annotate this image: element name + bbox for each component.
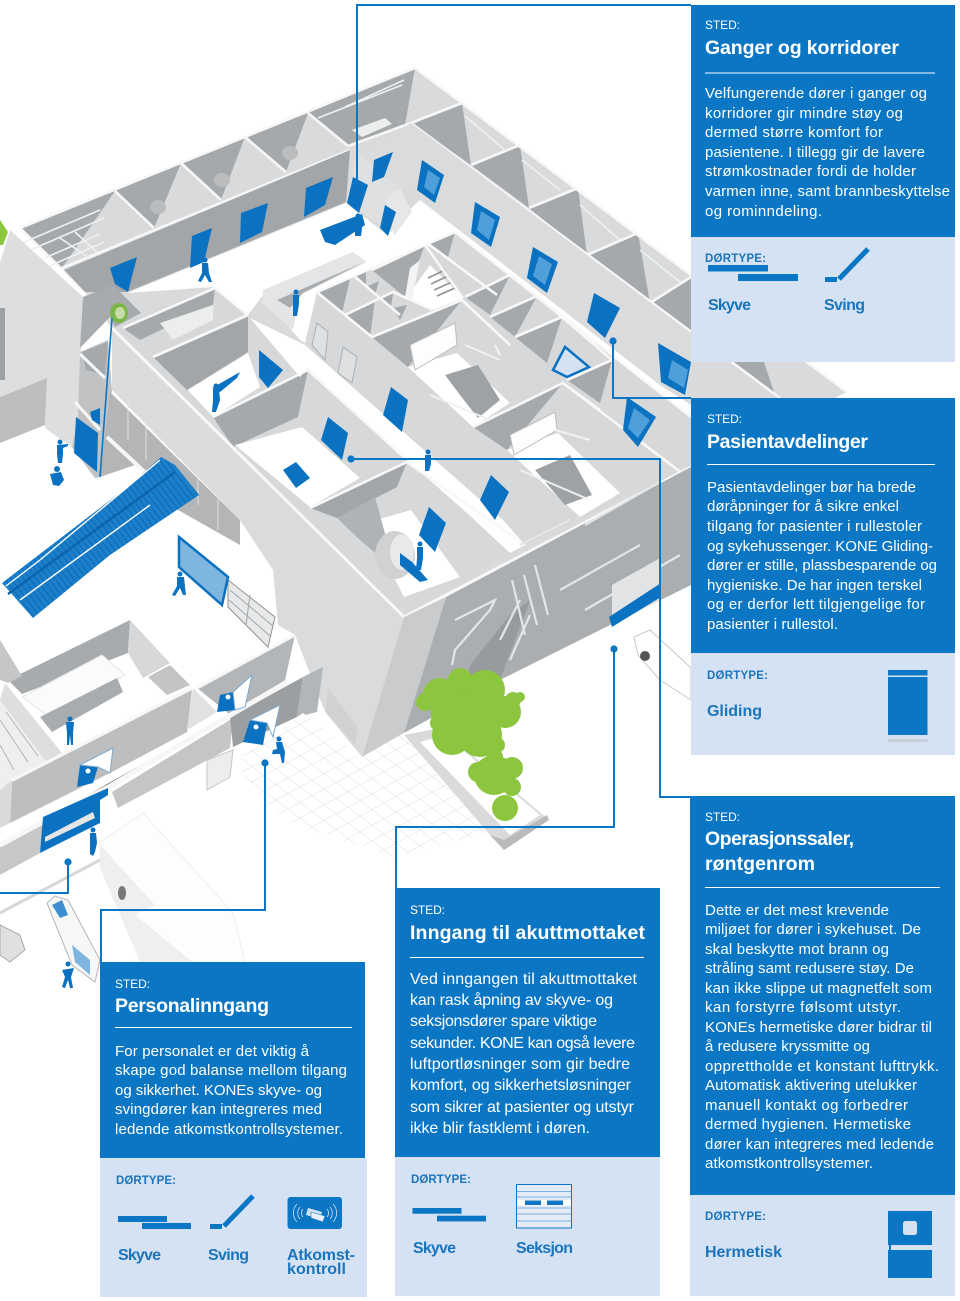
door types: Atkomst- [287, 1247, 355, 1264]
big light wall [112, 328, 404, 757]
text block: opprettholde et konstant lufttrykk. [705, 1058, 939, 1075]
panel: Pasientavdelinger [691, 398, 955, 755]
connector: Pasientavdelinger [609, 337, 691, 398]
heading: Pasientavdelinger: STED: [707, 412, 742, 426]
text block: hygieniske. De har ingen terskel [707, 577, 922, 594]
text block: KONEs hermetiske dører bidrar til [705, 1019, 932, 1036]
door types [116, 1175, 355, 1278]
text block: komfort, og sikkerhetsløsninger [410, 1077, 632, 1094]
leaf [0, 220, 8, 245]
text block: og rominndeling. [705, 203, 822, 220]
text block: døråpninger for å sikre enkel [707, 498, 899, 515]
text block: Pasientavdelinger bør ha brede [707, 479, 916, 496]
text block: stråling samt redusere støy. De [705, 960, 914, 977]
text block: atkomstkontrollsystemer. [705, 1155, 873, 1172]
corridor white floor [127, 200, 691, 417]
vehicles [100, 813, 245, 962]
shelves in upper rooms [22, 80, 680, 282]
room floors [407, 265, 620, 517]
text block: manuell kontakt og forbedrer [705, 1097, 908, 1114]
panel: Inngang til akuttmottaket [395, 888, 660, 1296]
door types: Skyve [413, 1240, 456, 1257]
text block [115, 1043, 347, 1138]
text block: skal beskytte mot brann og [705, 941, 889, 958]
door type [705, 1211, 932, 1278]
text block: tilgang for pasienter i rullestoler [707, 518, 922, 535]
text block: For personalet er det viktig å [115, 1043, 310, 1060]
small doors [312, 323, 357, 383]
text block: kan ikke slippe ut magnetfelt som [705, 980, 932, 997]
central rooms block [308, 232, 691, 545]
heading: Operasjonssaler [705, 810, 940, 888]
connector: Personalinngang [101, 759, 269, 962]
door types: Sving [824, 297, 865, 314]
text block: pasienter i rullestol. [707, 616, 838, 633]
door type: DØRTYPE: [707, 670, 768, 682]
paving [233, 713, 487, 857]
front faces [362, 597, 446, 757]
upper long wall [357, 123, 691, 405]
text block: pasientene. I tillegg gir de lavere [705, 144, 925, 161]
text block: seksjonsdører spare viktige [410, 1013, 597, 1030]
text block [705, 902, 939, 1172]
text block: sekunder. KONE kan også levere [410, 1034, 635, 1052]
door types: kontroll [287, 1261, 346, 1278]
text block: Velfungerende dører i ganger og [705, 85, 927, 102]
text block: dører kan integreres med ledende [705, 1136, 934, 1153]
building illustration [0, 68, 847, 988]
door glazing [424, 170, 688, 438]
panel: Operasjonssaler, røntgenrom [690, 796, 955, 1296]
door type [707, 670, 928, 742]
glass wall behind escalator [100, 392, 240, 545]
door types: DØRTYPE: [705, 253, 766, 265]
text block: og sykehussenger. KONE Gliding- [707, 538, 933, 555]
green reel [110, 303, 128, 323]
text block: korridorer gir mindre støy og [705, 105, 903, 122]
upper rooms [20, 68, 775, 395]
nurses station [262, 252, 367, 330]
text block [707, 479, 937, 633]
text block: Automatisk aktivering utelukker [705, 1077, 917, 1094]
text block: kan forstyrre følsomt utstyr. [705, 999, 901, 1016]
left rooms [112, 287, 525, 617]
heading: Operasjonssaler: Operasjonssaler, [705, 828, 854, 850]
heading: Operasjonssaler: STED: [705, 810, 740, 824]
door type: Hermetisk [705, 1244, 782, 1261]
door types: Skyve [708, 297, 751, 314]
door types: Seksjon [516, 1240, 573, 1257]
roof mass [20, 68, 847, 617]
text block: miljøet for dører i sykehuset. De [705, 921, 921, 938]
text block: dermed større komfort for [705, 124, 883, 141]
left tall wall [0, 230, 83, 447]
outer wall [112, 718, 233, 808]
text block: varmen inne, samt brannbeskyttelse [705, 183, 950, 200]
operating tables and shelves [230, 323, 557, 455]
lower left rooms [0, 620, 192, 790]
heading: Inngang: Inngang til akuttmottaket [410, 922, 646, 944]
white strip between rooms [250, 318, 525, 553]
connector: Inngang [396, 645, 618, 889]
text block: dermed hygienen. Hermetiske [705, 1116, 911, 1133]
text block: og er derfor lett tilgjengelige for [707, 596, 925, 613]
connector: Ganger og korridorer [357, 5, 691, 180]
door type: Gliding [707, 703, 762, 720]
text block: å redusere kryssmitte og [705, 1038, 870, 1055]
text block: Dette er det mest krevende [705, 902, 889, 919]
connector: reel [100, 318, 112, 477]
doors [40, 152, 691, 853]
icon: section door [516, 1184, 572, 1228]
heading: Pasientavdelinger: Pasientavdelinger [707, 431, 868, 453]
text block: Ved inngangen til akuttmottaket [410, 971, 638, 988]
door types: Skyve [118, 1247, 161, 1264]
panel: Ganger og korridorer [691, 5, 955, 362]
text block: ikke blir fastklemt i døren. [410, 1120, 590, 1137]
text block [410, 971, 638, 1137]
door types [705, 249, 868, 314]
connector: left edge [0, 858, 72, 893]
heading: Ganger og korridorer: STED: [705, 18, 740, 32]
door types: DØRTYPE: [411, 1174, 471, 1186]
heading: Personalinngang [115, 977, 352, 1028]
text block: dører er stille, plassbesparende og [707, 557, 937, 574]
text block: skape god balanse mellom tilgang [115, 1062, 347, 1079]
elevator column [72, 340, 112, 478]
tree [416, 668, 525, 821]
door types: Sving [208, 1247, 249, 1264]
heading: Inngang [410, 903, 646, 958]
text block: luftportløsninger som gir bedre [410, 1056, 630, 1073]
planter [404, 728, 549, 850]
text block: strømkostnader fordi de holder [705, 163, 916, 180]
door types [411, 1174, 573, 1257]
people [50, 214, 431, 988]
text block [705, 85, 950, 220]
connector: Operasjonssaler [347, 455, 691, 797]
corridor dark wall [64, 150, 350, 292]
shelves gate [228, 580, 275, 647]
icon: access control [288, 1197, 342, 1229]
text block: som sikrer at pasienter og utstyr [410, 1099, 635, 1116]
beds and patients [320, 214, 365, 245]
panel: Personalinngang [100, 962, 367, 1297]
heading: Pasientavdelinger [707, 412, 935, 465]
heading: Ganger og korridorer [705, 18, 935, 74]
text block: ledende atkomstkontrollsystemer. [115, 1121, 343, 1138]
heading: Ganger og korridorer: Ganger og korridorer [705, 37, 899, 59]
heading: Operasjonssaler: røntgenrom [705, 853, 815, 875]
escalator [2, 457, 199, 618]
wall 1 [10, 690, 192, 823]
door types: DØRTYPE: [116, 1175, 176, 1187]
text block: og sikkerhet. KONEs skyve- og [115, 1082, 322, 1099]
text block: kan rask åpning av skyve- og [410, 991, 613, 1009]
heading: Personalinngang: STED: [115, 977, 150, 991]
text block: svingdører kan integreres med [115, 1101, 322, 1118]
heading: Inngang: STED: [410, 903, 445, 917]
heading: Personalinngang: Personalinngang [115, 995, 269, 1017]
door type: DØRTYPE: [705, 1211, 766, 1223]
